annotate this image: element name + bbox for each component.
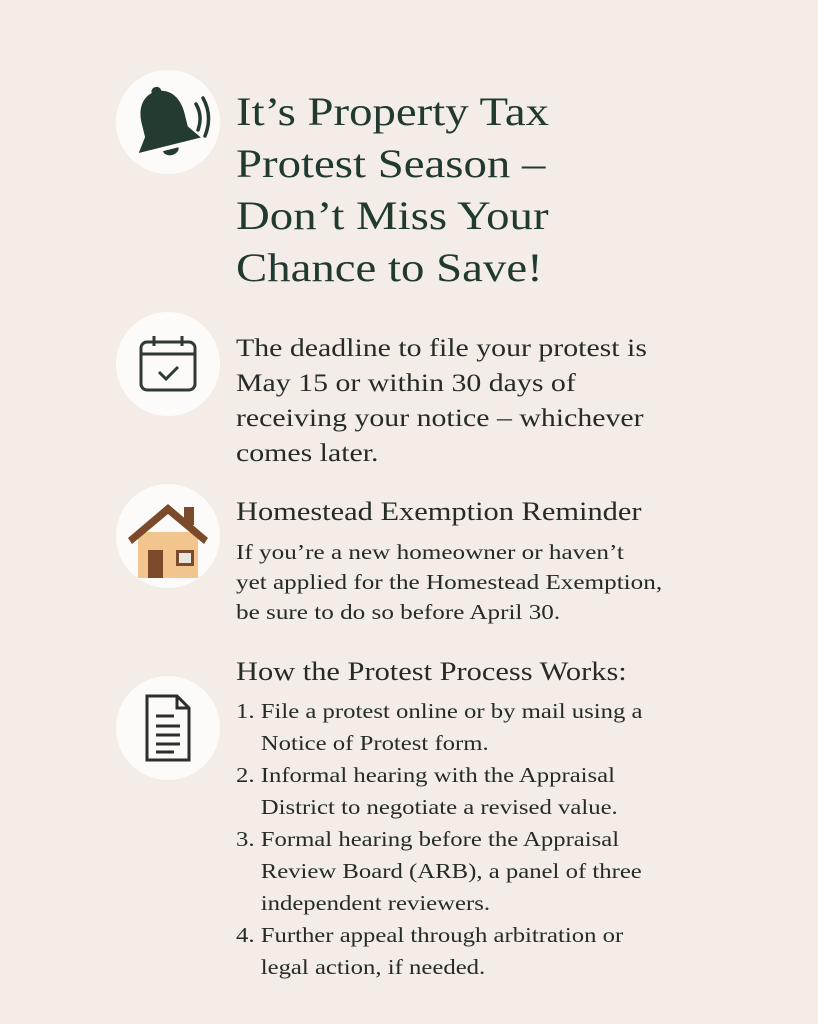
process steps: 3. Formal hearing before the Appraisal [236,827,619,851]
process heading: How the Protest Process Works: [236,657,627,686]
deadline text: receiving your notice – whichever [236,403,644,432]
process steps: 2. Informal hearing with the Appraisal [236,763,615,787]
icon: bell [116,70,220,174]
process steps: independent reviewers. [261,891,490,915]
deadline text [236,333,647,467]
title: Don’t Miss Your [236,193,549,238]
homestead text [236,540,662,624]
icon: house [116,484,220,588]
process steps [236,699,643,979]
process steps: 4. Further appeal through arbitration or [236,923,623,947]
title: Protest Season – [236,141,545,186]
deadline text: comes later. [236,438,379,467]
process steps: 1. File a protest online or by mail using a [236,699,643,723]
homestead text: yet applied for the Homestead Exemption, [236,570,662,594]
deadline text: The deadline to file your protest is [236,333,647,362]
homestead text: be sure to do so before April 30. [236,600,560,624]
title: Chance to Save! [236,245,543,290]
process steps: Notice of Protest form. [261,731,489,755]
icon: calendar [116,312,220,416]
title [236,89,549,290]
homestead text: If you’re a new homeowner or haven’t [236,540,624,564]
homestead heading: Homestead Exemption Reminder [236,497,642,526]
icon: document [116,676,220,780]
process steps: Review Board (ARB), a panel of three [261,859,642,883]
title: It’s Property Tax [236,89,549,134]
process steps: legal action, if needed. [261,955,485,979]
process steps: District to negotiate a revised value. [261,795,618,819]
deadline text: May 15 or within 30 days of [236,368,576,397]
